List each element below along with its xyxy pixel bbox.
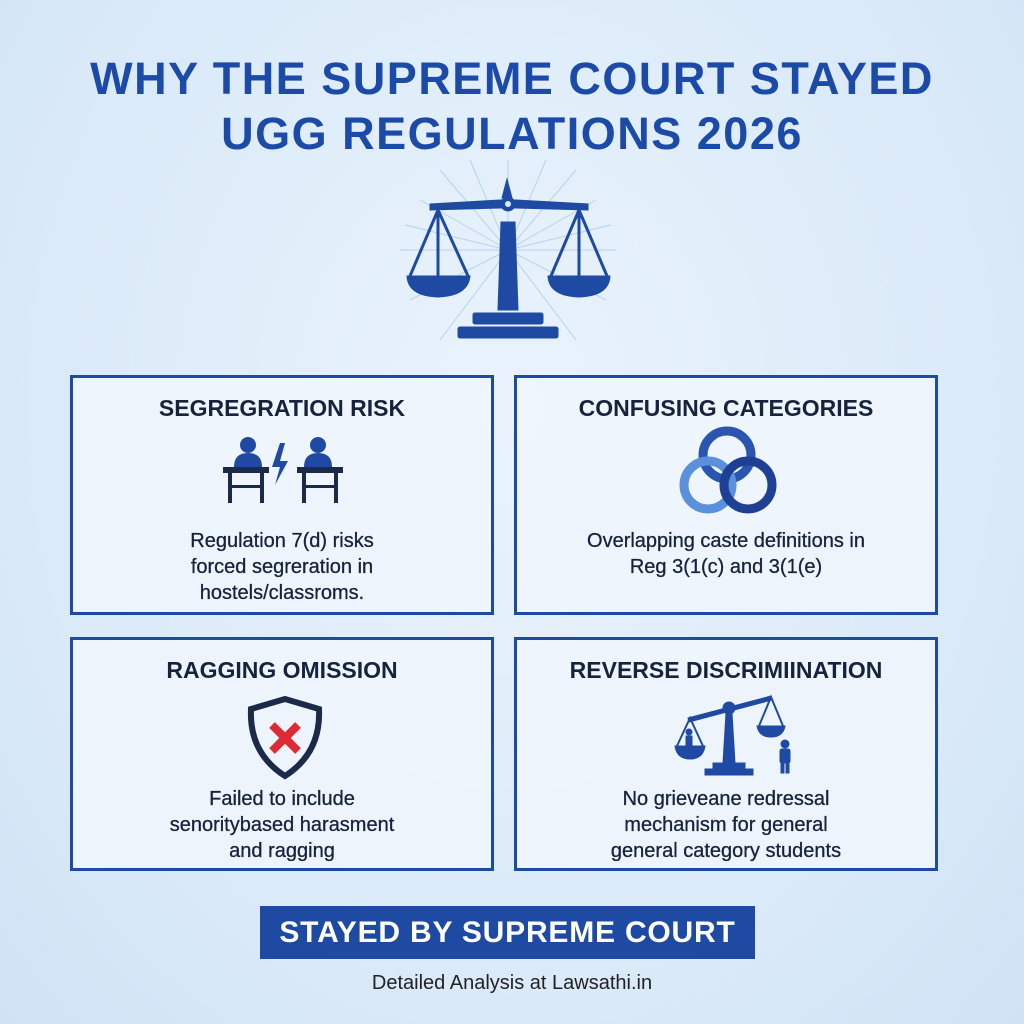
panel: segregation risk: forced segreration in xyxy=(191,556,373,578)
panel: ragging omission: senoritybased harasment xyxy=(170,814,394,836)
panel: ragging omission: RAGGING OMISSION xyxy=(166,657,398,683)
panel: segregation risk xyxy=(70,375,494,615)
panel: confusing categories: CONFUSING CATEGORIES xyxy=(579,395,873,421)
panel: reverse discrimination: No grieveane redressal xyxy=(623,788,829,810)
panel: confusing categories xyxy=(514,375,938,615)
panel: reverse discrimination: general category students xyxy=(611,840,841,862)
panel: confusing categories: Reg 3(1(c) and 3(1(e) xyxy=(630,556,822,578)
panel: ragging omission: and ragging xyxy=(229,840,335,862)
icon: tilted scale with person xyxy=(674,694,790,776)
footer text: Detailed Analysis at Lawsathi.in xyxy=(372,972,652,994)
panel: reverse discrimination: REVERSE DISCRIMIINATION xyxy=(570,657,882,683)
panel: confusing categories: Overlapping caste definitions in xyxy=(587,530,865,552)
panel: reverse discrimination xyxy=(514,637,938,871)
title xyxy=(90,53,934,159)
icon: overlapping rings xyxy=(680,426,776,514)
icon: students at desks xyxy=(223,437,343,503)
panel: segregation risk: SEGREGRATION RISK xyxy=(159,395,405,421)
panel: segregation risk: hostels/classroms. xyxy=(200,582,364,604)
banner: stayed xyxy=(260,906,755,959)
panel: reverse discrimination: mechanism for general xyxy=(624,814,828,836)
icon: shield with cross xyxy=(248,696,322,780)
icon: scales of justice xyxy=(400,160,616,340)
panel: segregation risk: Regulation 7(d) risks xyxy=(190,530,374,552)
title: UGG REGULATIONS 2026 xyxy=(221,108,803,159)
banner: stayed: STAYED BY SUPREME COURT xyxy=(279,916,736,949)
panel: ragging omission: Failed to include xyxy=(209,788,355,810)
panel: ragging omission xyxy=(70,637,494,871)
title: WHY THE SUPREME COURT STAYED xyxy=(90,53,934,104)
